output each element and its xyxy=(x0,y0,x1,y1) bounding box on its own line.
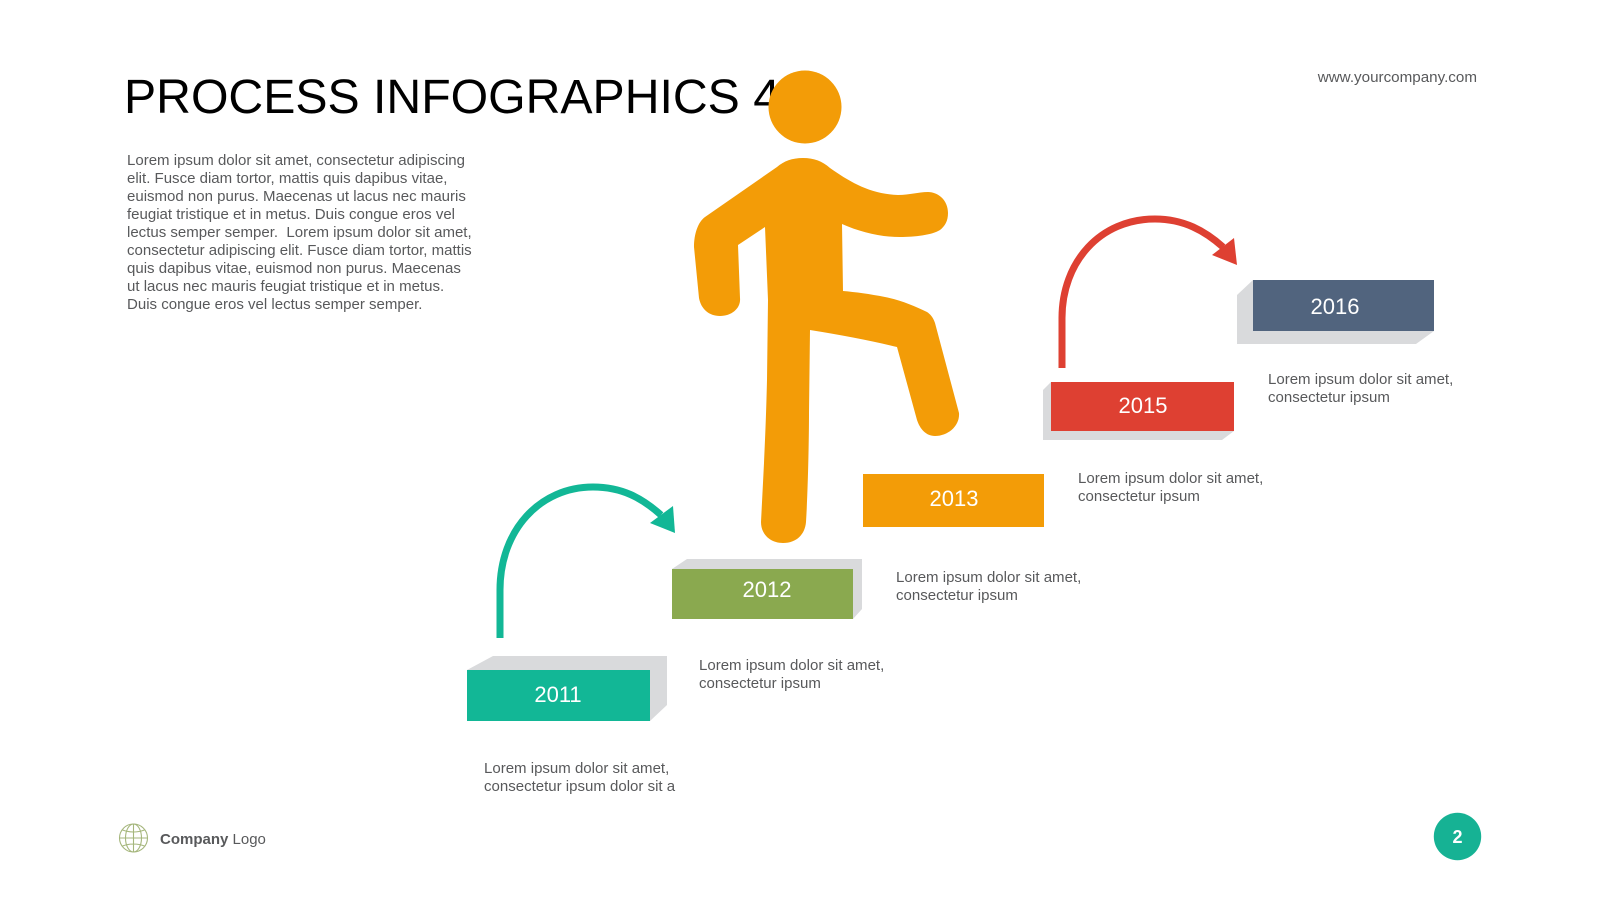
description 2016: consectetur ipsum xyxy=(1268,389,1390,406)
step 2015: 2015 xyxy=(1119,393,1167,418)
description 2013 xyxy=(896,569,1081,604)
arrow: 2015 to 2016 xyxy=(1062,219,1237,368)
step 2012: 2012 xyxy=(743,577,791,602)
icon: person climbing steps xyxy=(694,70,959,543)
step 2013: 2013 xyxy=(930,486,978,511)
intro text block: lectus semper semper. Lorem ipsum dolor sit amet, xyxy=(127,224,472,241)
intro text block: feugiat tristique et in metus. Duis congue eros vel xyxy=(127,206,455,223)
description 2011: consectetur ipsum dolor sit a xyxy=(484,778,676,795)
intro text block xyxy=(127,152,472,313)
description 2015: Lorem ipsum dolor sit amet, xyxy=(1078,470,1263,487)
arrow: 2011 to 2012 xyxy=(500,487,675,638)
intro text block: ut lacus nec mauris feugiat tristique et in metus. xyxy=(127,278,444,295)
page number badge: 2 xyxy=(1452,827,1463,847)
description 2016: Lorem ipsum dolor sit amet, xyxy=(1268,371,1453,388)
description 2012: Lorem ipsum dolor sit amet, xyxy=(699,657,884,674)
intro text block: elit. Fusce diam tortor, mattis quis dapibus vitae, xyxy=(127,170,447,187)
description 2013: consectetur ipsum xyxy=(896,587,1018,604)
company logo text: Company Logo xyxy=(160,831,266,848)
description 2011: Lorem ipsum dolor sit amet, xyxy=(484,760,669,777)
title: PROCESS INFOGRAPHICS 4 xyxy=(124,70,780,124)
icon: globe logo xyxy=(120,824,148,852)
intro text block: quis dapibus vitae, euismod non purus. Maecenas xyxy=(127,260,461,277)
website url: www.yourcompany.com xyxy=(1317,69,1477,86)
step 2012 xyxy=(672,559,862,619)
step 2011: 2011 xyxy=(534,682,582,707)
step 2016: 2016 xyxy=(1311,294,1359,319)
page number badge xyxy=(1434,813,1481,860)
description 2012: consectetur ipsum xyxy=(699,675,821,692)
intro text block: euismod non purus. Maecenas ut lacus nec mauris xyxy=(127,188,466,205)
step 2016 xyxy=(1237,280,1434,344)
step 2011 xyxy=(467,656,667,721)
step 2015 xyxy=(1043,382,1234,440)
intro text block: Lorem ipsum dolor sit amet, consectetur adipiscing xyxy=(127,152,465,169)
description 2013: Lorem ipsum dolor sit amet, xyxy=(896,569,1081,586)
intro text block: consectetur adipiscing elit. Fusce diam tortor, mattis xyxy=(127,242,472,259)
description 2015 xyxy=(1078,470,1263,505)
intro text block: Duis congue eros vel lectus semper semper. xyxy=(127,296,422,313)
step 2013 xyxy=(863,474,1044,527)
description 2012 xyxy=(699,657,884,692)
description 2015: consectetur ipsum xyxy=(1078,488,1200,505)
description 2016 xyxy=(1268,371,1453,406)
description 2011 xyxy=(484,760,676,795)
